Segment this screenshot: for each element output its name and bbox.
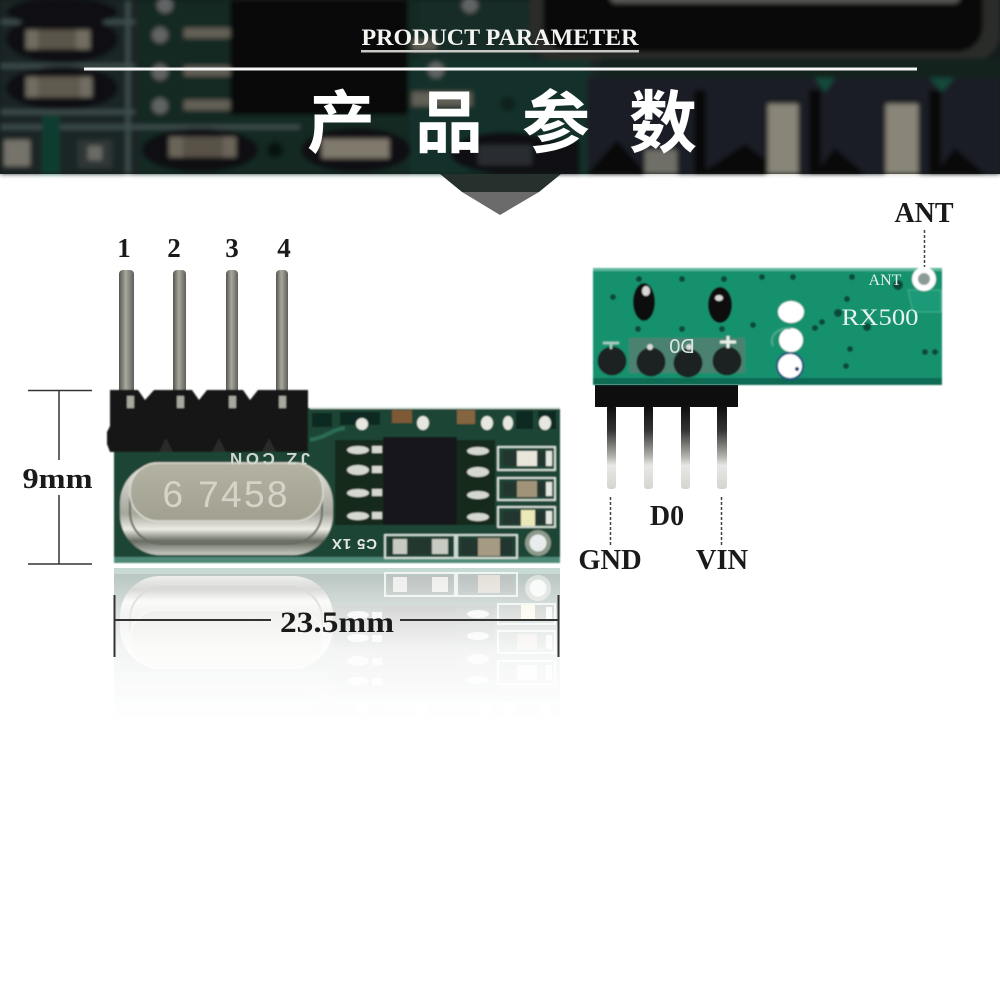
- label: D0: D0: [650, 501, 684, 532]
- label: ANT: ANT: [894, 198, 954, 229]
- right module photo: [593, 267, 942, 489]
- label: ANT: [894, 198, 954, 267]
- dimension: 23.5mm: [114, 595, 559, 657]
- right module photo: D0: [669, 334, 695, 356]
- title: chinese heading: 品: [415, 86, 483, 162]
- silkscreen labels: ANT: [869, 272, 902, 289]
- pin header block: [107, 390, 308, 452]
- left module reflection: [114, 568, 560, 668]
- title: chinese heading: [307, 86, 697, 162]
- subtitle: product parameter: PRODUCT PARAMETER: [362, 25, 639, 50]
- silkscreen text: C5 1X: [332, 535, 377, 552]
- pins: [607, 405, 727, 489]
- pins: [119, 270, 288, 402]
- label: GND: [578, 497, 642, 576]
- left module photo: [107, 270, 560, 563]
- label: GND: GND: [578, 545, 642, 576]
- arrow: down triangle: [440, 174, 561, 215]
- dimension: 9mm: 9mm: [22, 463, 92, 495]
- silkscreen text: JZ CON: [230, 449, 310, 468]
- pin header block: [595, 385, 738, 407]
- green board: [593, 267, 942, 385]
- pin numbers: 1: [117, 233, 131, 263]
- header banner: [0, 0, 1000, 174]
- pin numbers: 2: [167, 233, 181, 263]
- pin numbers: [117, 233, 291, 263]
- pin numbers: 4: [277, 233, 291, 263]
- silkscreen text: [230, 449, 377, 552]
- right module photo: RX500: [842, 305, 918, 330]
- title: chinese heading: 数: [629, 86, 697, 162]
- title: chinese heading: 产: [307, 86, 375, 162]
- title: chinese heading: 参: [522, 86, 590, 162]
- pin numbers: 3: [225, 233, 239, 263]
- label: VIN: VIN: [696, 545, 749, 576]
- circuit board photo: [0, 0, 1000, 174]
- label: VIN: [696, 497, 749, 576]
- dimension: 9mm: [22, 390, 92, 564]
- dimension: 23.5mm: 23.5mm: [280, 606, 394, 639]
- crystal marking: 6 7458: [162, 474, 288, 515]
